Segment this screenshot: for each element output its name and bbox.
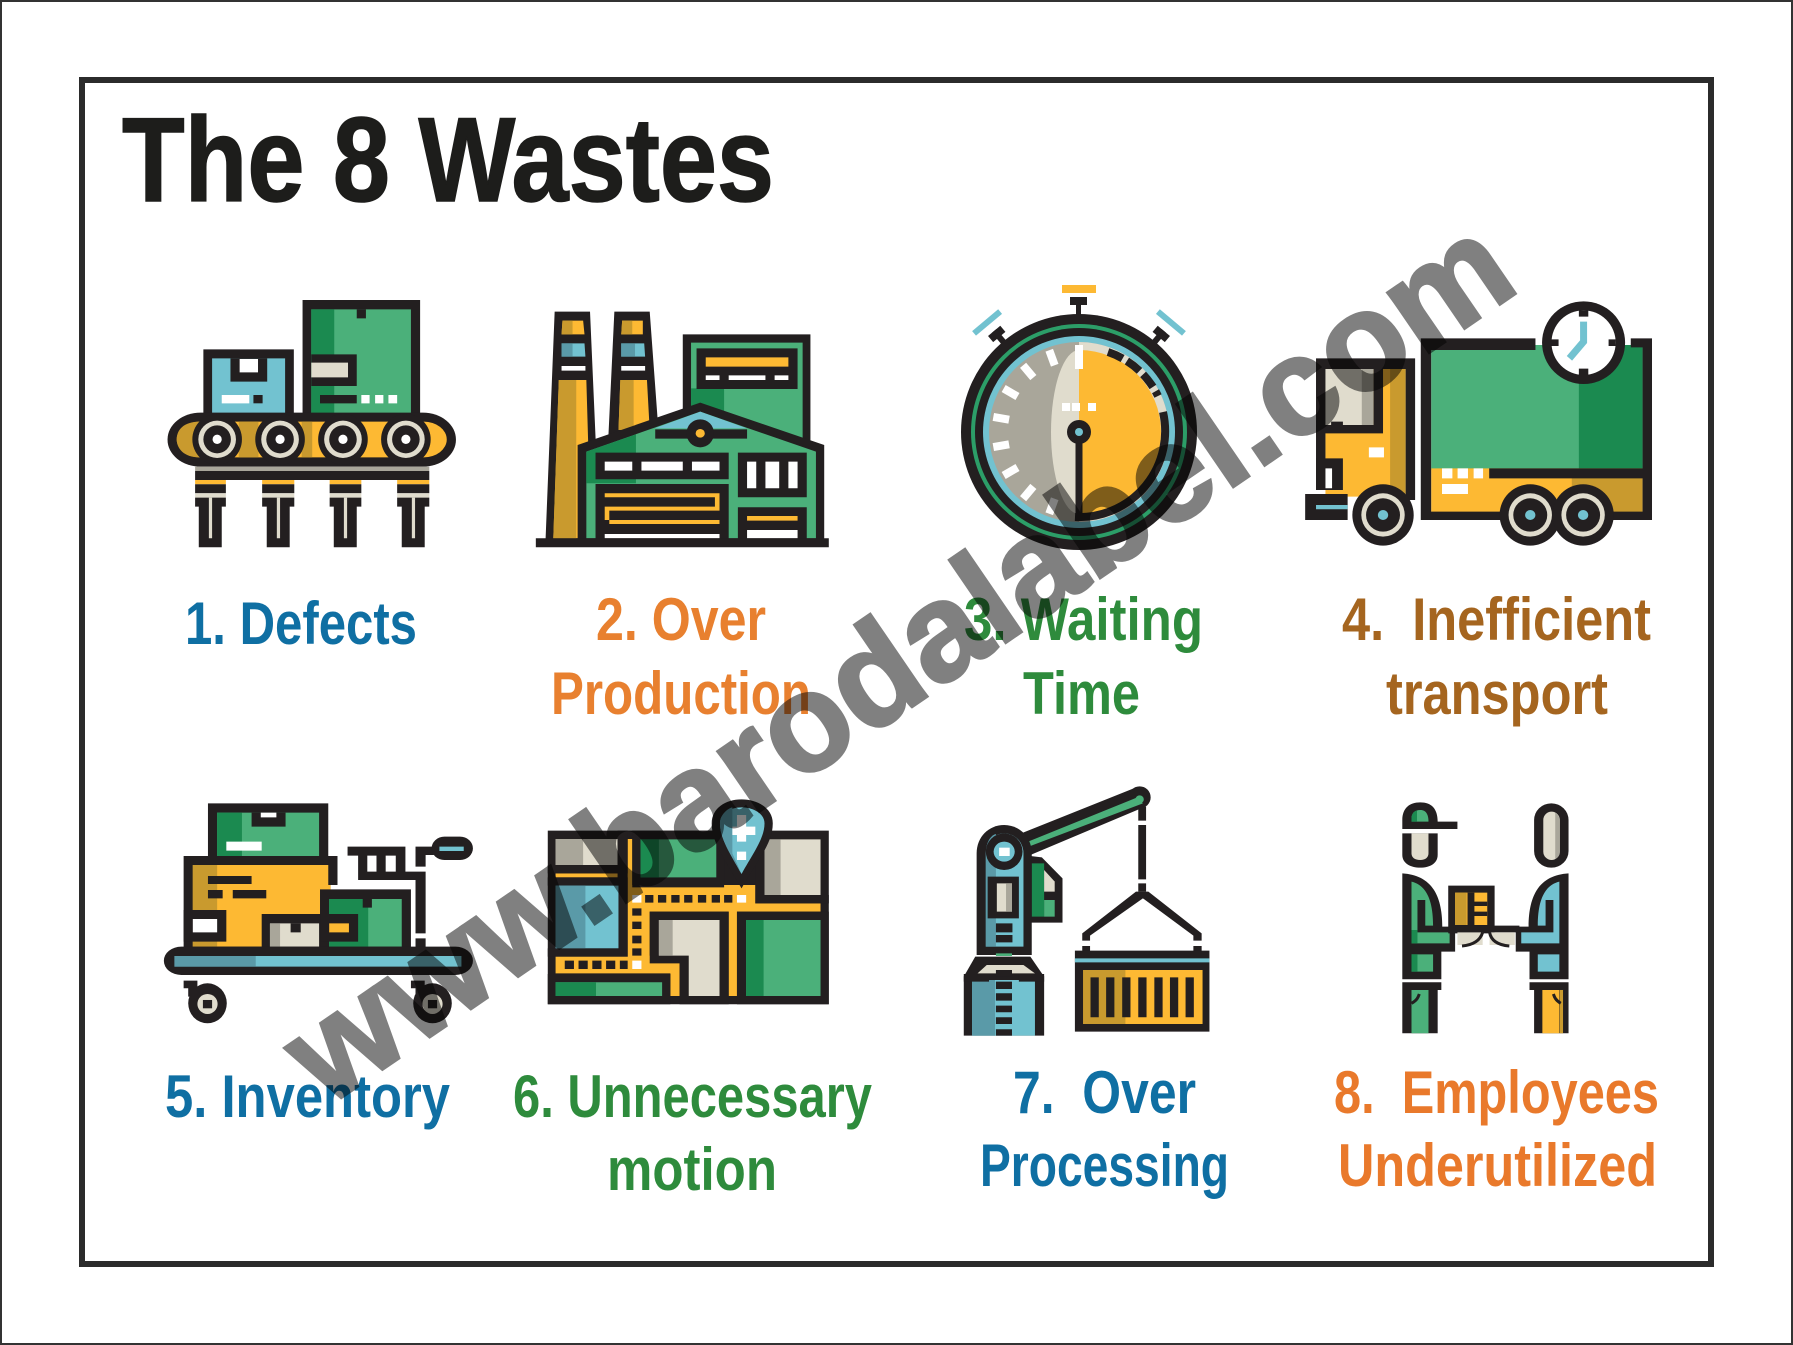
label: 4. Inefficient transport: transport <box>1386 660 1608 727</box>
main frame <box>82 80 1711 1264</box>
icon: two workers exchanging a box (employees underutilized) <box>1402 802 1569 1033</box>
icon: stopwatch (waiting time) <box>961 285 1197 550</box>
label: 5. Inventory: 5. Inventory <box>165 1063 451 1130</box>
label: 2. Over Production: 2. Over <box>596 586 766 653</box>
watermark: www.barodalabel.com <box>255 186 1539 1133</box>
label: 3. Waiting Time: 3. Waiting <box>964 586 1203 653</box>
label: 1. Defects: 1. Defects <box>185 590 417 657</box>
label: 7. Over Processing: 7. Over <box>1013 1059 1196 1126</box>
icon: robot crane with container (over processing) <box>964 786 1209 1036</box>
label: 2. Over Production <box>551 586 811 727</box>
label: 4. Inefficient transport <box>1342 586 1651 727</box>
icon: trolley with boxes (inventory) <box>164 803 473 1023</box>
icon: factory (over production) <box>536 312 829 547</box>
label: 8. Employees Underutilized: Underutilized <box>1338 1132 1657 1199</box>
label: 3. Waiting Time: Time <box>1023 660 1140 727</box>
label: 2. Over Production: Production <box>551 660 811 727</box>
label: 8. Employees Underutilized: 8. Employees <box>1334 1059 1659 1126</box>
title: The 8 Wastes <box>122 93 774 227</box>
label: 6. Unnecessary motion: 6. Unnecessary <box>513 1063 873 1130</box>
label: 7. Over Processing <box>980 1059 1229 1199</box>
icon: conveyor belt with boxes (defects) <box>168 300 456 547</box>
label: 6. Unnecessary motion: motion <box>607 1136 777 1203</box>
icon: map with location pin (unnecessary motion) <box>548 799 829 1004</box>
label: 6. Unnecessary motion <box>513 1063 873 1203</box>
label: 4. Inefficient transport: 4. Inefficient <box>1342 586 1651 653</box>
label: 8. Employees Underutilized <box>1334 1059 1659 1199</box>
icon: truck with clock (inefficient transport) <box>1305 301 1652 546</box>
label: 3. Waiting Time <box>964 586 1203 727</box>
label: 7. Over Processing: Processing <box>980 1132 1229 1199</box>
